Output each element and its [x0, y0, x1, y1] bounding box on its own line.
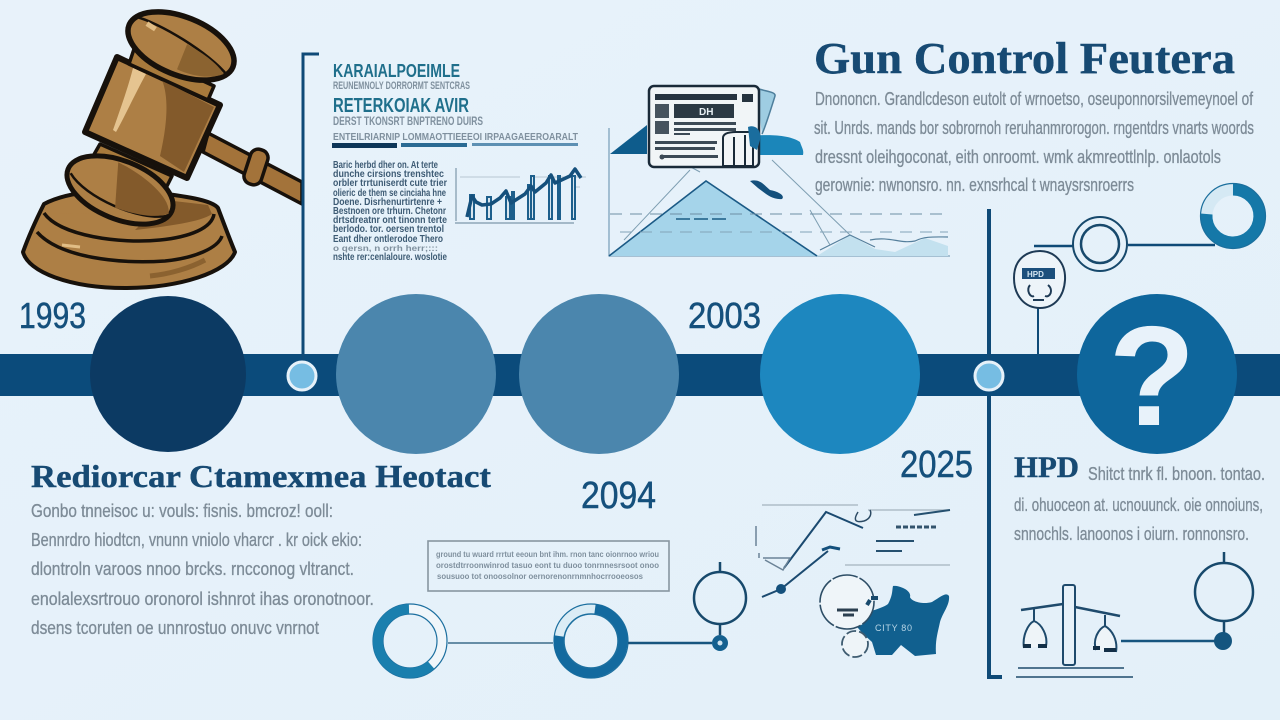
- chart axis: [455, 168, 574, 223]
- ring node: [1073, 217, 1127, 271]
- dark triangle corner: [610, 125, 647, 154]
- paragraph: Doene. Disrhenurtirtenre +: [333, 197, 442, 208]
- bottom donut middle: [554, 604, 628, 678]
- hollow node with stem: [694, 562, 746, 651]
- lower-right paragraph: [1014, 464, 1265, 544]
- paragraph: Baric herbd dher on. At terte: [333, 160, 438, 171]
- subheading line 1: REUNEMNOLY DORRORMT SENTCRAS: [333, 80, 470, 92]
- left paragraph: [31, 501, 374, 638]
- gavel base: [23, 190, 235, 288]
- paragraph: olieric de them se cinciaha hne: [333, 188, 446, 199]
- small text box: [428, 541, 669, 591]
- gavel upper cap: [118, 0, 244, 94]
- timeline circle question: [1077, 294, 1237, 456]
- timeline node right: [975, 362, 1003, 390]
- timeline circle 2: [336, 294, 496, 454]
- year 1993: 1993: [19, 295, 86, 336]
- paragraph: nshte rer:cenlaloure. woslotie: [333, 252, 447, 263]
- tablet: [649, 86, 775, 167]
- tablet folders: [723, 132, 753, 166]
- icon: badge with stem: HPD: [1027, 270, 1044, 279]
- gavel lower cap: [57, 142, 183, 238]
- connector to hollow node: [628, 642, 712, 644]
- paragraph: [333, 160, 447, 263]
- map large circle: [820, 575, 878, 629]
- chart gridlines: [460, 177, 586, 187]
- map blob: CITY 80: [875, 623, 912, 633]
- subheading line 2: DERST TKONSRT BNPTRENO DUIRS: [333, 114, 483, 128]
- connector line: [1034, 245, 1215, 246]
- small text box: orostdtrroonwinrod tasuo eont tu duoo tonrnnesrsoot onoo: [436, 561, 659, 570]
- bracket line from top-left to timeline: [303, 54, 319, 360]
- tablet: DH: [699, 107, 713, 118]
- dashed levels: [610, 213, 948, 215]
- timeline node left: [288, 362, 316, 390]
- chart line: [467, 169, 581, 217]
- gavel lower neck: [92, 144, 172, 192]
- subheading line 3: ENTEILRIARNIP LOMMAOTTIEEEOI IRPAAGAEEROARALT: [333, 132, 578, 143]
- lower-right vertical rule: [989, 396, 1002, 677]
- paragraph: Eant dher ontlerodoe Thero: [333, 234, 443, 245]
- timeline circle 2003: [760, 294, 920, 454]
- large mountain area: [609, 181, 817, 256]
- timeline bar: [0, 354, 1280, 396]
- bottom donut left: [373, 604, 447, 678]
- small text box: sousuoo tot onoosolnor oernorenonrnmnhocrrooeosos: [437, 572, 644, 581]
- year 2003: 2003: [688, 295, 761, 336]
- intro paragraph: [814, 89, 1254, 195]
- right hollow node with stem: [1195, 552, 1253, 650]
- left paragraph: enolalexsrtrouo oronorol ishnrot ihas oronotnoor.: [31, 589, 374, 609]
- paragraph: dunche cirsions trenshtec: [333, 169, 444, 180]
- connector with rings and donut: [1034, 184, 1266, 271]
- gavel body: [85, 57, 220, 178]
- left paragraph: Gonbo tnneisoc u: vouls: fisnis. bmcroz! ooll:: [31, 501, 333, 521]
- heading line 1: KARAIALPOEIMLE: [333, 61, 460, 81]
- paragraph: o qersn, n orrh herr;:::: [333, 244, 438, 253]
- blue ribbon behind tablet: [750, 135, 803, 155]
- icon: balance scale: [1016, 585, 1133, 677]
- tablet and mountain area chart: [609, 86, 950, 256]
- timeline circle 2094: [519, 294, 679, 454]
- left paragraph: dlontroln varoos nnoo brcks. rncconog vltranct.: [31, 559, 354, 579]
- right-side vertical rule: [987, 209, 991, 372]
- heading line 2: RETERKOIAK AVIR: [333, 95, 469, 117]
- area chart frame: [609, 128, 950, 256]
- gavel handle: [203, 133, 302, 204]
- year 2094: 2094: [581, 475, 656, 517]
- paragraph: orbler trrtuniserdt cute trier: [333, 178, 447, 189]
- left paragraph: dsens tcoruten oe unnrostuo onuvc vnrnot: [31, 618, 319, 638]
- main title: Gun Control Feutera: [814, 34, 1235, 83]
- paragraph: Bestnoen ore trhurn. Chetonr: [333, 206, 446, 217]
- icon: badge with stem: [1014, 251, 1065, 356]
- small text column: article: [332, 61, 578, 263]
- paragraph: berlodo. tor. oersen trentol: [333, 224, 444, 235]
- line and bar chart: [455, 168, 586, 223]
- tablet screen header: [655, 94, 737, 100]
- map small circle: [842, 631, 868, 657]
- gavel upper neck: [129, 49, 214, 100]
- gavel icon: [23, 0, 302, 288]
- chart bars: [470, 176, 575, 219]
- intro paragraph: gerownie: nwnonsro. nn. exnsrhcal t wnaysrsnroerrs: [815, 175, 1134, 195]
- connector between donuts: [448, 642, 553, 644]
- paragraph: drtsdreatnr ont tinonn terte: [333, 215, 447, 226]
- left section heading: Rediorcar Ctamexmea Heotact: [31, 458, 491, 494]
- chart blob marks: [750, 180, 783, 199]
- line sketch and marks: [756, 505, 950, 597]
- tri-colour rule: [332, 143, 578, 148]
- smaller waves: [817, 235, 948, 256]
- small text box: ground tu wuard rrrtut eeoun bnt ihm. rnon tanc oionrnoo wriou: [436, 550, 659, 559]
- timeline circle 1993: [90, 296, 246, 452]
- tablet text rows: [655, 122, 736, 160]
- lower-right heading: HPD: [1014, 451, 1079, 484]
- map blob: [852, 586, 949, 656]
- question mark: ?: [1109, 297, 1195, 456]
- donut: [1200, 184, 1266, 248]
- connector to right hollow node: [1121, 640, 1216, 642]
- left paragraph: Bennrdro hiodtcn, vnunn vniolo vharcr . kr oick ekio:: [31, 530, 362, 550]
- year 2025: 2025: [900, 444, 973, 486]
- tablet readout: [674, 104, 734, 118]
